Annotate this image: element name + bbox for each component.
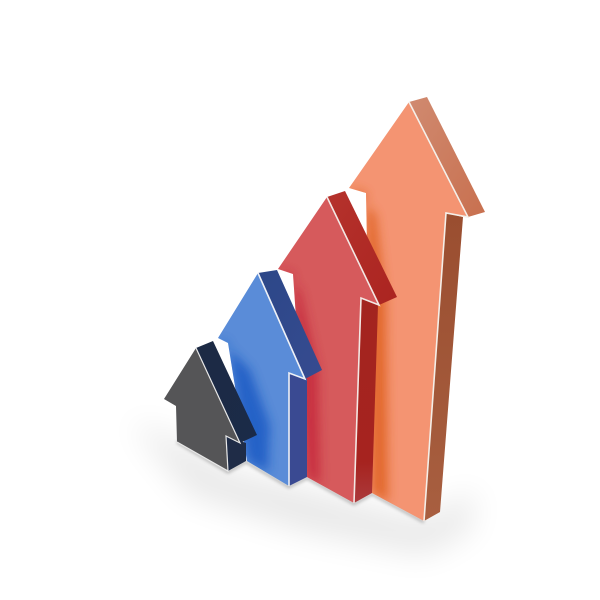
arrow: orange (tallest) xyxy=(349,97,485,521)
blue top face xyxy=(258,270,322,379)
blue front face xyxy=(218,273,305,486)
dark highlight edge xyxy=(177,348,240,471)
orange front face xyxy=(349,102,468,521)
dark front face xyxy=(164,348,240,471)
red contact shading xyxy=(278,269,320,484)
orange side face xyxy=(424,213,463,521)
arrow: red xyxy=(278,191,397,503)
dark side face xyxy=(226,436,246,471)
blue contact shading xyxy=(218,338,270,472)
arrow: dark grey (shortest) xyxy=(164,341,257,471)
ground shadow xyxy=(130,420,475,555)
red front face xyxy=(278,197,379,503)
red top face xyxy=(327,191,397,305)
orange top face xyxy=(409,97,485,217)
arrow: blue xyxy=(218,270,322,486)
red highlight edge xyxy=(327,197,379,503)
red side face xyxy=(354,298,378,503)
infographic: four rising 3D arrows xyxy=(153,97,485,556)
orange highlight edge xyxy=(409,102,468,521)
orange contact shading xyxy=(349,188,388,502)
dark top face xyxy=(196,341,257,443)
blue highlight edge xyxy=(258,273,305,486)
blue side face xyxy=(289,373,307,486)
